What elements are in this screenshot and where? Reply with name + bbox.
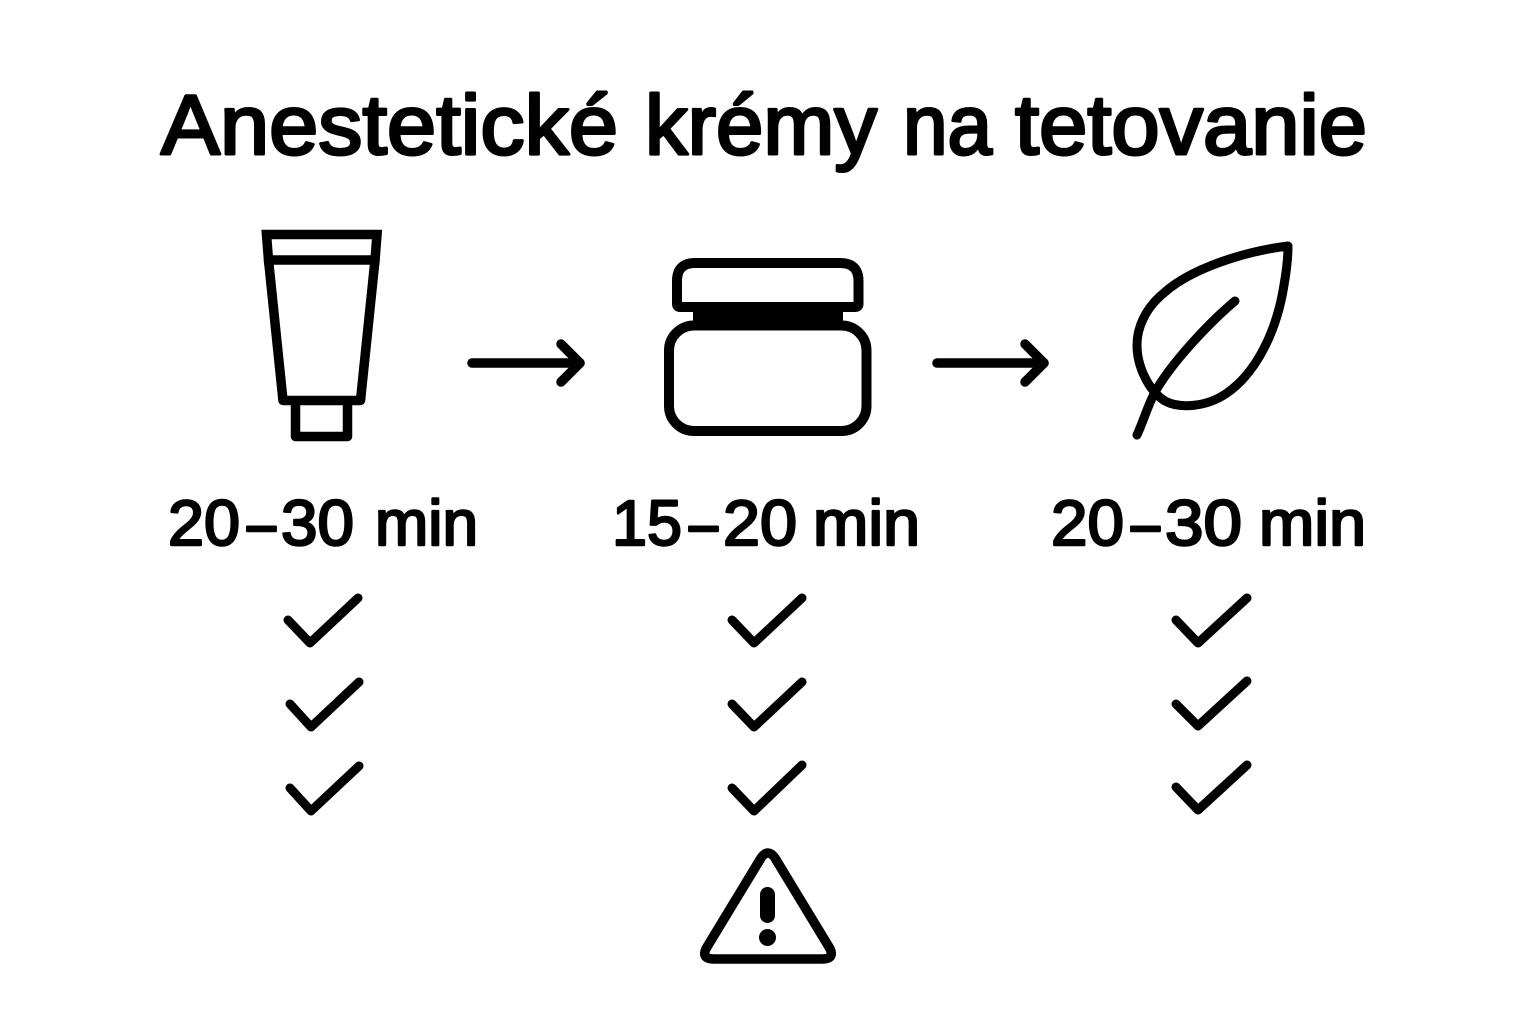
icon: cream tube [266,234,377,436]
duration label: jar: 20 [723,487,797,559]
duration label: tube: min [375,487,478,559]
duration label: jar: min [813,487,920,559]
duration label: jar: 15 [612,487,682,559]
arrow: tube to jar [472,344,580,382]
title: na [903,78,992,172]
duration label: tube: 30 [281,487,354,559]
duration label: jar [612,487,920,559]
checkmarks: tube column [288,598,359,811]
title: Anestetické [161,78,618,172]
checkmarks: jar column [732,598,802,811]
duration label: tube: – [247,487,276,559]
duration label: jar: – [689,487,718,559]
duration label: leaf: 30 [1165,487,1242,559]
duration label: leaf [1051,487,1366,559]
icon: leaf [1137,246,1288,435]
title [161,78,1367,172]
title: tetovanie [1015,78,1367,172]
duration label: tube: 20 [168,487,240,559]
arrow: jar to leaf [937,344,1044,382]
checkmarks: leaf column [1176,598,1247,810]
duration label: leaf: – [1131,487,1160,559]
icon: cream jar [669,263,866,431]
title: krémy [645,78,877,172]
duration label: leaf: 20 [1051,487,1124,559]
duration label: leaf: min [1259,487,1366,559]
duration label: tube [168,487,478,559]
icon: warning triangle [705,853,831,959]
